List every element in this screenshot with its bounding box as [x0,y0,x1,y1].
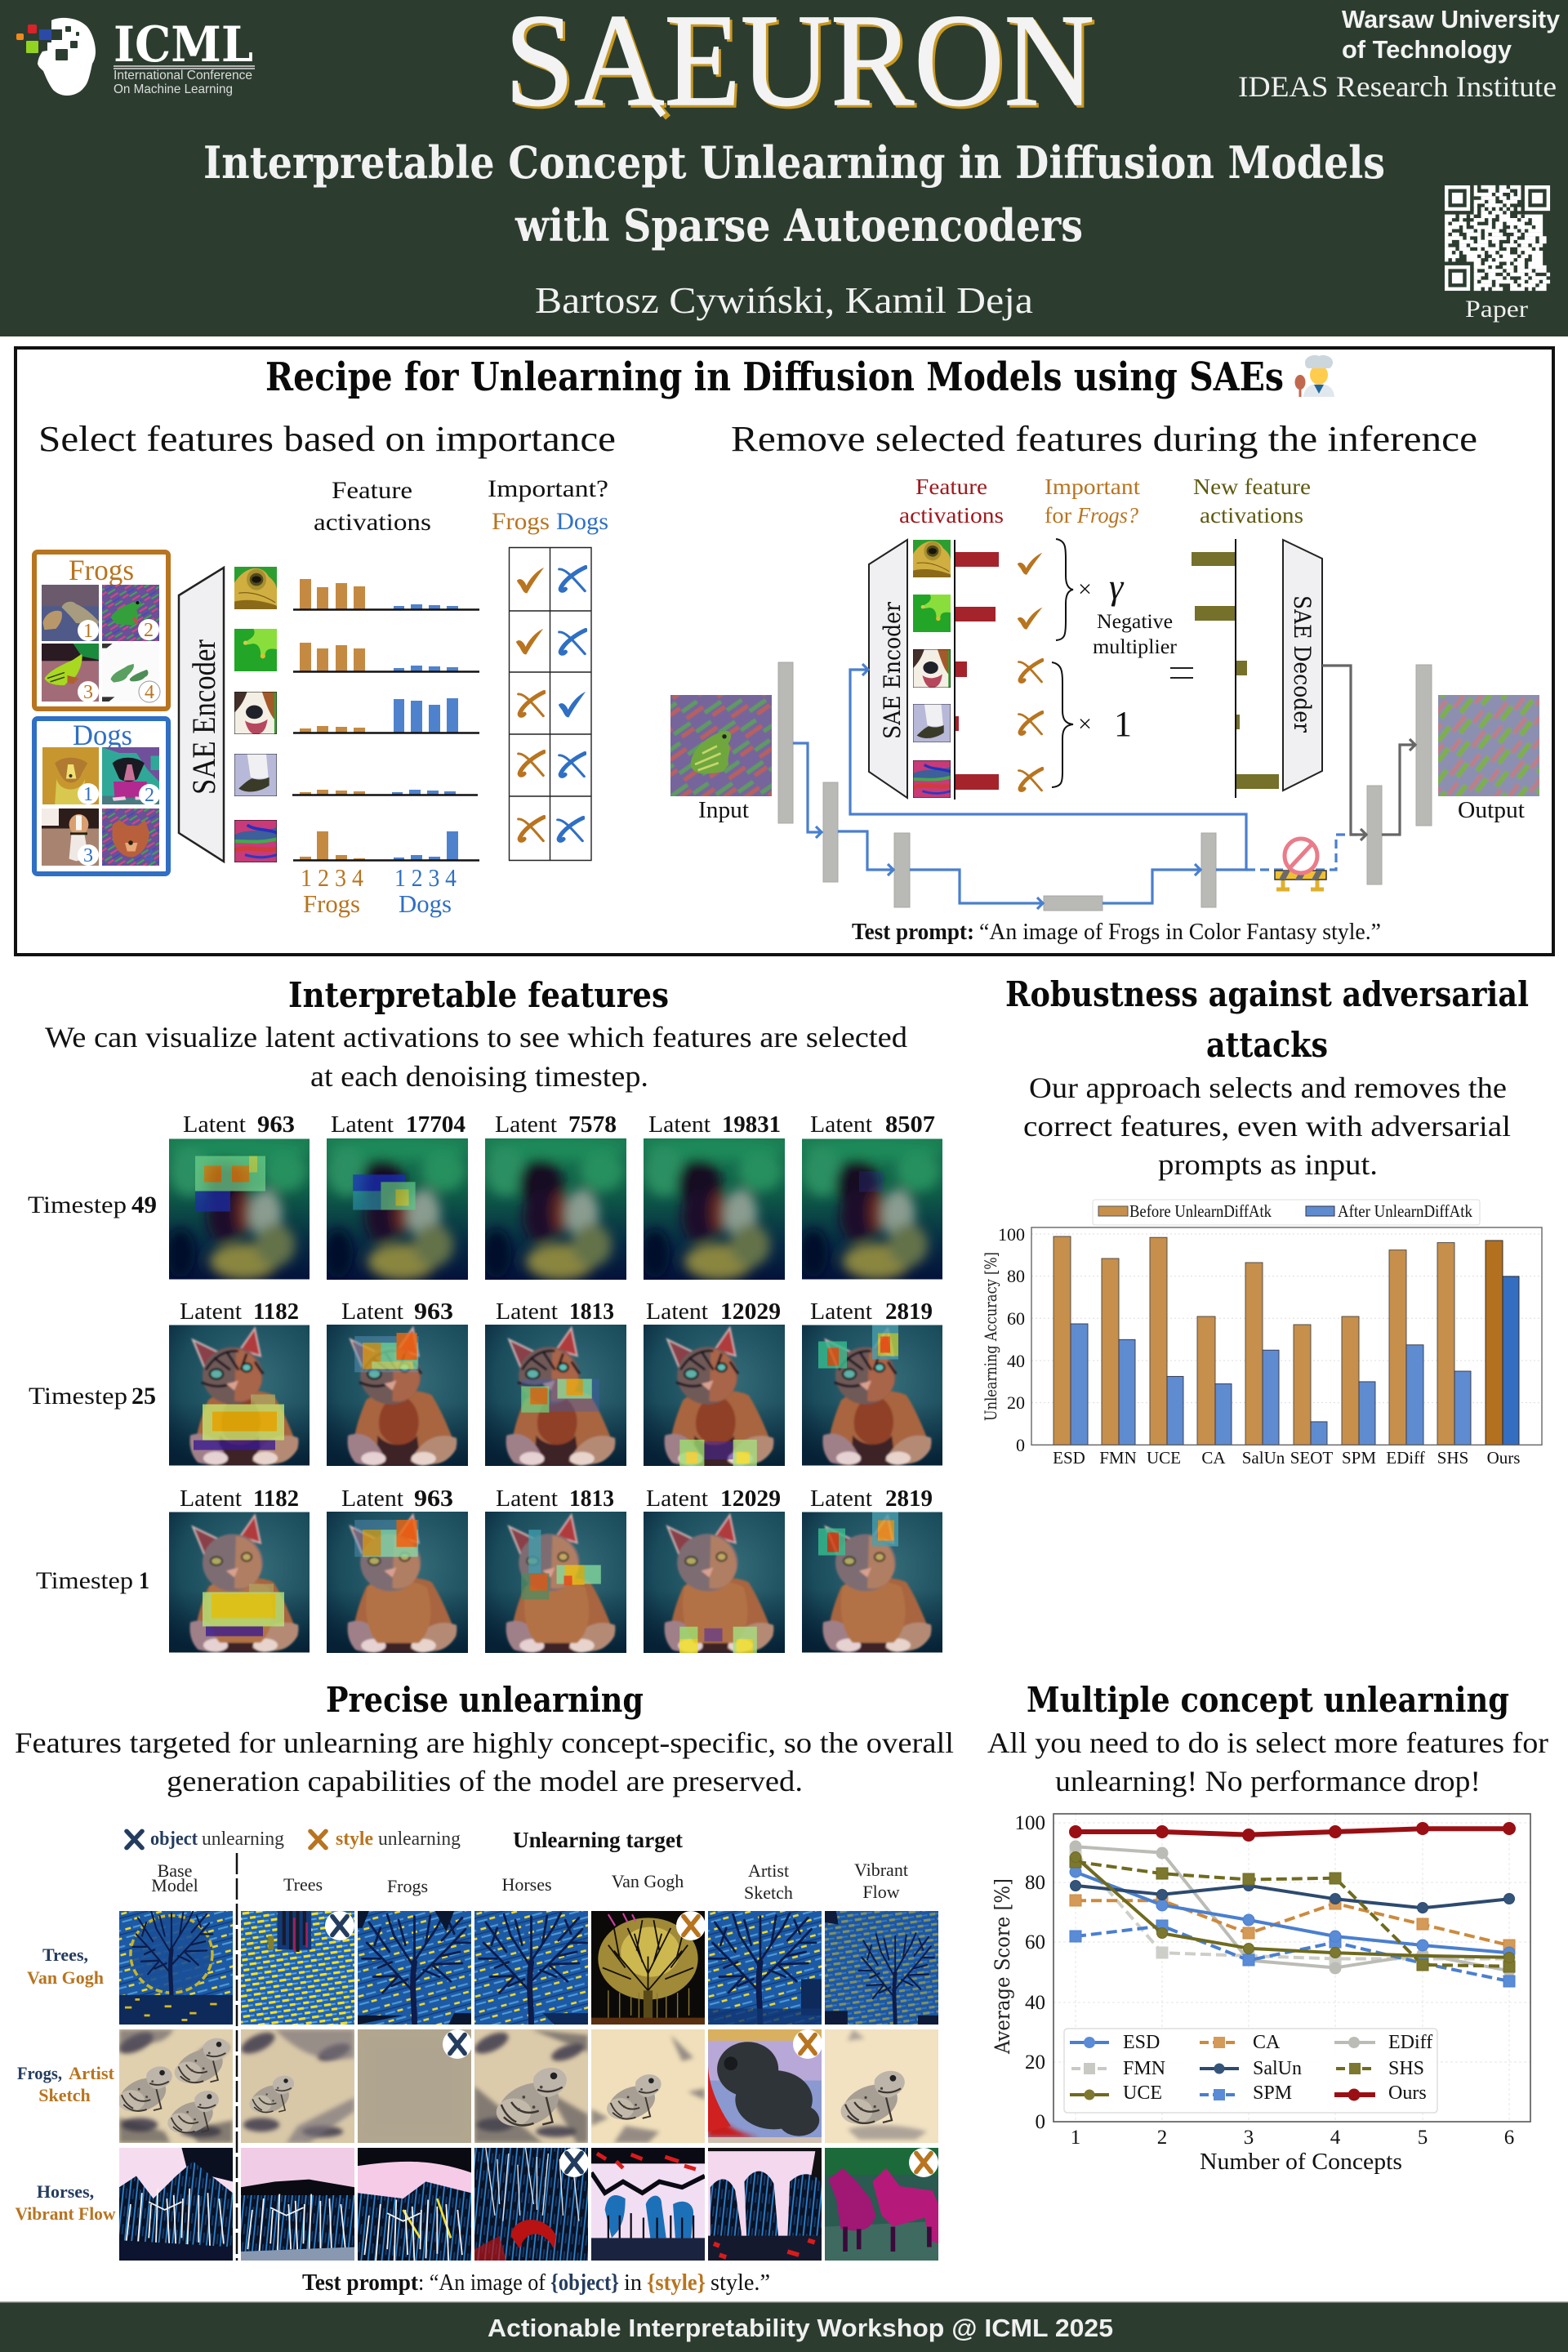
description [15,1726,954,1797]
latent labels [180,1299,933,1325]
section: robustness [981,974,1542,1468]
x axis labels: SHS [1437,1448,1468,1468]
row labels: Trees, [42,1944,88,1965]
timestep label: 49 [131,1192,157,1218]
y axis [1014,1812,1045,2133]
heatmap: latent 8507 [802,1138,942,1279]
heatmap: latent 12029 [644,1512,785,1653]
x axis: 2 [1157,2127,1167,2149]
importance table [509,547,591,861]
decoder arrows [1322,666,1415,840]
bar axis labels: 1 2 3 4 [394,863,457,892]
timestep label: 1 [139,1567,149,1594]
y axis: 40 [1007,1351,1025,1371]
latent labels: Latent [496,1486,558,1512]
latent labels [180,1486,933,1512]
important label [488,475,608,535]
row labels: Van Gogh [27,1967,104,1988]
SAE encoder [179,568,224,862]
subpanel: remove features [662,419,1548,945]
test prompt: Test prompt [302,2270,419,2296]
column labels: for [1045,503,1071,528]
column labels: Frogs [387,1876,428,1896]
chart legend: UCE [1123,2082,1162,2104]
frogs example box: Frogs [69,554,134,586]
latent labels: Latent [180,1299,242,1325]
x axis label: Number of Concepts [1200,2149,1402,2175]
subheading: Select features based on importance [38,419,616,459]
latent labels: 1182 [253,1486,299,1512]
heatmap: latent 2819 [802,1512,942,1653]
dogs example box: 2 [145,785,154,806]
icon: chef with spoon [1295,355,1334,397]
chart legend: Ours [1388,2082,1427,2104]
bar chart [981,1200,1542,1468]
row label: frogs artist: Frogs, [17,2063,62,2083]
column labels: New feature [1193,474,1311,499]
legend: After UnlearnDiffAtk [1338,1201,1472,1221]
SAE encoder: SAE Encoder [879,601,906,739]
series: EDiff [1070,1841,1515,1976]
latent labels: 7578 [568,1112,617,1138]
x axis: 1 [1071,2127,1080,2149]
test prompt: : “An image of [418,2270,546,2296]
gamma multiplier: × [1078,576,1092,603]
heatmap: latent 7578 [485,1138,626,1280]
description [45,1021,907,1093]
series: Ours [1070,1823,1516,1841]
heading: attacks [1206,1025,1328,1065]
x axis labels: CA [1201,1448,1226,1468]
gamma multiplier: Negative [1097,611,1173,633]
chart legend: FMN [1123,2058,1165,2079]
output image [1430,687,1548,823]
series: SalUn [1070,1880,1514,1913]
row labels: Vibrant Flow [15,2203,116,2224]
latent labels: Latent [646,1486,708,1512]
input image [662,687,780,823]
line chart [991,1812,1530,2175]
test prompt: {style} [647,2270,706,2296]
title: with Sparse Autoencoders [514,199,1083,252]
heading: Interpretable features [288,975,669,1015]
latent labels: Latent [495,1112,557,1138]
latent labels: 1813 [569,1299,614,1325]
test prompt: {object} [550,2270,619,2296]
x axis labels: UCE [1147,1448,1181,1468]
ICML logo: On Machine Learning [114,82,233,96]
affiliation: of Technology [1342,35,1512,64]
y axis: 0 [1016,1435,1025,1455]
image grid [114,1910,938,2266]
footer banner [0,2301,1568,2352]
heading: Precise unlearning [326,1680,644,1720]
latent labels: 2819 [885,1299,933,1325]
section: multiple concept unlearning [987,1680,1548,2175]
dogs example box [34,719,168,874]
timestep label [28,1192,157,1218]
ICML logo: ICML [114,16,253,74]
output image: Output [1458,797,1525,823]
row: timestep 49 [28,1112,942,1280]
y axis label: Average Score [%] [991,1878,1014,2055]
latent labels: Latent [341,1299,403,1325]
SAE decoder: SAE Decoder [1289,595,1316,733]
latent labels: Latent [183,1112,246,1138]
description [1023,1071,1511,1181]
legend: Before UnlearnDiffAtk [1129,1201,1272,1221]
y axis: 60 [1007,1308,1025,1329]
heatmap: latent 2819 [802,1325,942,1465]
description: correct features, even with adversarial [1023,1110,1511,1143]
important label: Important? [488,475,608,502]
latent labels: Latent [496,1299,558,1325]
feature activations label: Feature [332,477,412,504]
x axis labels: EDiff [1386,1448,1425,1468]
x axis: 6 [1504,2127,1514,2149]
latent labels: 1813 [569,1486,614,1512]
subheading: Remove selected features during the inference [731,419,1477,459]
red activation bars [955,540,999,800]
column labels: activations [1200,503,1303,528]
row labels: Horses, [37,2181,94,2202]
dogs example box: Dogs [73,719,132,751]
feature activations label [314,477,431,536]
x axis labels: FMN [1099,1448,1137,1468]
latent labels: 2819 [885,1486,933,1512]
column labels: Flow [862,1882,900,1902]
timestep label: Timestep [28,1192,127,1218]
heatmap: latent 963 [327,1325,468,1466]
latent labels: 17704 [406,1112,466,1138]
column labels: Sketch [744,1882,793,1903]
legend: style [336,1829,373,1850]
chart legend: SPM [1253,2082,1292,2104]
column labels: Van Gogh [612,1871,684,1891]
chart legend [1064,2029,1437,2113]
test prompt: style.” [710,2270,770,2296]
heading: Multiple concept unlearning [1027,1680,1509,1720]
affiliation: Warsaw University [1342,5,1561,33]
test prompt: Test prompt: [852,920,974,945]
gamma multiplier: multiplier [1093,636,1178,658]
heading [1005,974,1529,1065]
feature thumbnails [234,567,277,862]
affiliation: IDEAS Research Institute [1238,70,1557,103]
title: Interpretable Concept Unlearning in Diffusion Models [203,136,1385,189]
description: generation capabilities of the model are preserved. [167,1765,803,1797]
row: trees [119,1910,938,2025]
row: frogs [114,2028,938,2143]
heatmap: latent 19831 [644,1138,785,1280]
test prompt: “An image of Frogs in Color Fantasy style.” [979,920,1381,945]
x axis: 3 [1244,2127,1254,2149]
latent labels: 12029 [720,1486,781,1512]
U-Net blocks [778,662,1432,911]
important label: Frogs [492,508,550,535]
bar axis labels: Frogs [303,889,360,918]
y axis: 60 [1025,1931,1045,1953]
gamma multiplier [1056,539,1178,658]
row label: frogs artist: Artist [69,2063,115,2083]
series: ESD [1070,1866,1515,1958]
heatmap: latent 1813 [485,1512,626,1653]
input image: Input [698,797,749,823]
header banner [0,0,1568,336]
row: timestep 1 [36,1486,942,1654]
column labels [151,1860,908,1903]
latent labels: 8507 [885,1112,935,1138]
y axis label: Unlearning Accuracy [%] [981,1252,1000,1421]
latent labels: Latent [646,1299,708,1325]
x axis labels: SPM [1342,1448,1376,1468]
y axis: 100 [1014,1812,1045,1834]
column labels: Feature [915,474,987,499]
frogs example box [34,552,168,709]
SAE decoder [1283,540,1322,791]
y axis [998,1224,1025,1455]
description: prompts as input. [1158,1148,1378,1181]
x axis labels [1053,1448,1520,1468]
column labels: Horses [501,1874,552,1895]
dogs example box: 1 [83,784,93,805]
ICML logo [16,16,255,96]
bar axis labels [301,863,457,918]
latent labels: 1182 [253,1299,299,1325]
ICML logo: International Conference [114,69,252,82]
recipe heading: Recipe for Unlearning in Diffusion Models using SAEs [265,354,1284,400]
row labels: Sketch [38,2085,91,2105]
new feature bars [1192,539,1279,798]
legend [1093,1200,1480,1225]
before bars [1054,1236,1503,1445]
section: interpretable features [28,975,942,1654]
subpanel: select features [34,419,616,918]
series: SPM [1070,1920,1515,1987]
latent labels: Latent [180,1486,242,1512]
orange marks [1018,553,1042,791]
x axis [1071,2127,1514,2149]
row labels [15,1944,116,2224]
latent labels: Latent [810,1112,872,1138]
frogs example box: 2 [144,620,154,641]
description: at each denoising timestep. [310,1060,648,1093]
unit multiplier [1052,662,1132,787]
timestep label: Timestep [36,1567,133,1594]
legend: object [150,1829,198,1850]
legend: Unlearning target [513,1828,683,1852]
chart legend: CA [1253,2032,1281,2053]
affiliation [1238,5,1561,103]
legend: unlearning [378,1829,461,1850]
y axis: 20 [1025,2051,1045,2074]
latent labels: 963 [414,1299,453,1325]
timestep label: 25 [131,1383,156,1410]
U-Net arrows [793,664,1357,909]
latent labels: Latent [331,1112,394,1138]
y axis: 100 [998,1224,1025,1245]
column labels: Important [1045,474,1141,499]
gamma multiplier: γ [1109,567,1125,607]
column labels [899,474,1311,528]
unlearning markers [325,1911,938,2177]
timestep label: Timestep [29,1383,127,1410]
description: Our approach selects and removes the [1029,1071,1507,1104]
title [203,136,1385,252]
x axis: 5 [1418,2127,1428,2149]
section: precise unlearning [15,1680,954,2296]
icon: road block [1275,839,1326,889]
after bars [1071,1276,1519,1445]
chart legend: SalUn [1253,2058,1302,2079]
x axis labels: SEOT [1290,1448,1333,1468]
heatmap: latent 963 [169,1138,310,1279]
chart legend: SHS [1388,2058,1424,2079]
y axis: 40 [1025,1992,1045,2014]
important label: Dogs [556,508,608,535]
heatmap: latent 1182 [169,1325,310,1465]
equals [1170,668,1193,678]
x axis labels: SalUn [1242,1448,1285,1468]
latent labels: 12029 [720,1299,781,1325]
latent labels: 19831 [722,1112,781,1138]
x axis labels: ESD [1053,1448,1085,1468]
feature activation bars [292,579,479,861]
row label: frogs artist [17,2063,115,2083]
x axis: 4 [1330,2127,1341,2149]
series: CA [1070,1895,1515,1951]
y axis: 0 [1036,2111,1045,2133]
column labels: Artist [748,1860,789,1881]
column labels: Trees [283,1874,323,1895]
column labels: Model [151,1875,198,1895]
column labels: activations [899,503,1004,528]
legend: unlearning [202,1829,284,1850]
description: unlearning! No performance drop! [1055,1765,1481,1797]
QR code [1444,185,1551,292]
SAE encoder: SAE Encoder [185,639,222,795]
SAE encoder [869,540,907,798]
latent labels: Latent [810,1486,872,1512]
test prompt: in [624,2270,642,2296]
series: UCE [1070,1852,1514,1963]
column labels: Base [158,1860,192,1881]
bar axis labels: Dogs [399,889,452,918]
latent labels: Latent [648,1112,710,1138]
heatmap: latent 963 [327,1512,468,1653]
legend [127,1828,683,1852]
description [987,1726,1548,1797]
latent labels: 963 [414,1486,453,1512]
row: horses [119,2148,938,2266]
dogs example box: 4 [145,846,154,867]
authors: Bartosz Cywiński, Kamil Deja [535,279,1033,321]
chart legend: EDiff [1388,2032,1432,2053]
description: Features targeted for unlearning are highly concept-specific, so the overall [15,1726,954,1759]
latent labels: Latent [810,1299,872,1325]
x axis labels: Ours [1487,1448,1520,1468]
y axis: 20 [1007,1392,1025,1413]
test prompt [302,2270,770,2296]
frogs example box: 4 [145,682,154,703]
latent labels [183,1112,935,1138]
QR caption: Paper [1465,296,1528,323]
column labels: Frogs? [1076,503,1138,528]
base model divider [236,1853,238,2261]
y axis: 80 [1007,1266,1025,1286]
column labels: Vibrant [854,1860,908,1880]
frogs example box: 1 [83,621,93,642]
footer banner: Actionable Interpretability Workshop @ ICML 2025 [488,2314,1113,2342]
row: timestep 25 [29,1299,942,1467]
heatmap: latent 1182 [169,1512,310,1653]
frogs example box: 3 [83,682,93,703]
panel: recipe for unlearning [16,348,1553,955]
description: We can visualize latent activations to see which features are selected [45,1021,907,1054]
series: SHS [1070,1856,1515,1972]
heatmap: latent 12029 [644,1325,785,1466]
feature activations label: activations [314,509,431,536]
chart legend: ESD [1123,2032,1160,2053]
feature thumbnails [913,540,951,798]
latent labels: Latent [341,1486,403,1512]
latent labels: 963 [257,1112,295,1138]
description: All you need to do is select more features for [987,1726,1548,1759]
bar axis labels: 1 2 3 4 [301,863,363,892]
unit multiplier: 1 [1114,704,1132,744]
y axis: 80 [1025,1872,1045,1894]
dogs example box: 3 [83,845,93,866]
series: FMN [1070,1847,1515,1965]
heatmap: latent 1813 [485,1325,626,1466]
unit multiplier: × [1078,710,1092,737]
heatmap: latent 17704 [327,1138,468,1280]
